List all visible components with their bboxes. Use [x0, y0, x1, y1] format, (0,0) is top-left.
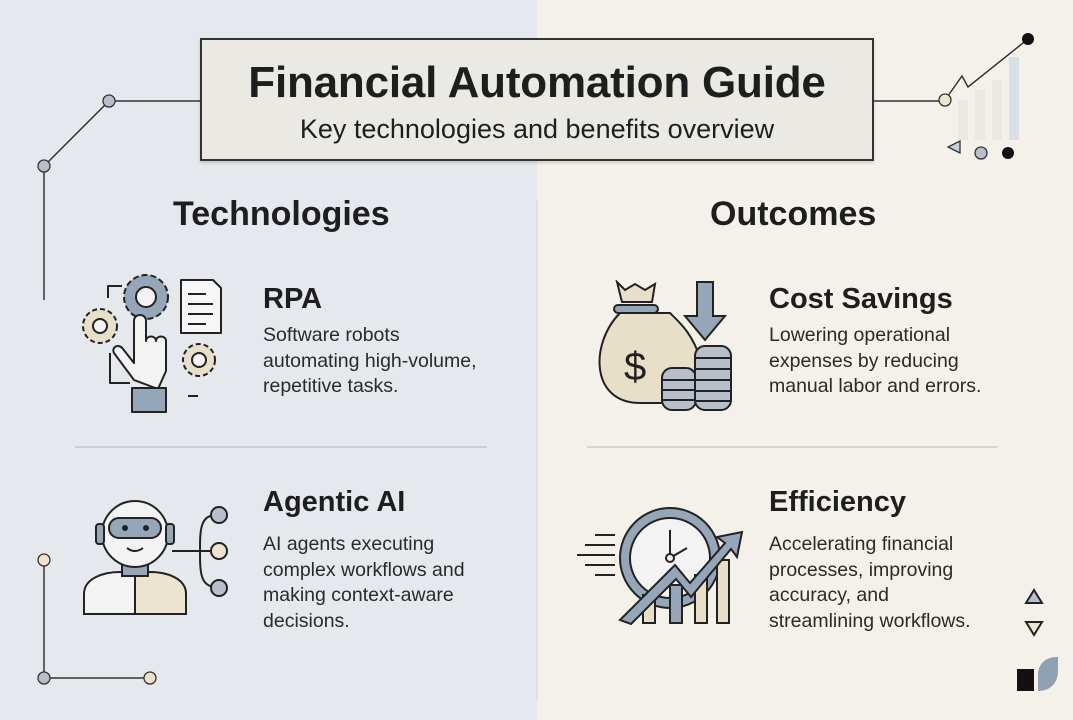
Efficiency title: Efficiency: [769, 486, 906, 518]
title box: [200, 38, 874, 161]
Efficiency description: processes, improving: [769, 558, 953, 580]
icon: cost savings: $: [624, 345, 646, 389]
Agentic AI description: decisions.: [263, 610, 350, 632]
subtitle: Key technologies and benefits overview: [300, 114, 774, 144]
title: Financial Automation Guide: [248, 58, 826, 107]
Efficiency description: [769, 533, 971, 632]
icon: Agentic AI: [83, 500, 228, 615]
heading: Outcomes: Outcomes: [710, 195, 876, 233]
Cost Savings title: Cost Savings: [769, 283, 953, 315]
decoration: left circuit lines: [37, 94, 200, 685]
Agentic AI description: AI agents executing: [263, 533, 434, 555]
heading: Technologies: Technologies: [173, 195, 390, 233]
Cost Savings description: [769, 324, 981, 397]
Efficiency description: accuracy, and: [769, 584, 889, 606]
RPA description: [263, 324, 477, 397]
icon: efficiency: [577, 507, 744, 625]
RPA description: automating high-volume,: [263, 350, 477, 372]
Agentic AI title: Agentic AI: [263, 486, 405, 518]
decoration: triangles and shapes: [1017, 588, 1058, 691]
Cost Savings description: expenses by reducing: [769, 350, 959, 372]
RPA title: RPA: [263, 283, 322, 315]
Efficiency description: Accelerating financial: [769, 533, 953, 555]
Efficiency description: streamlining workflows.: [769, 610, 971, 632]
decoration: right chart: [874, 33, 1034, 160]
Agentic AI description: complex workflows and: [263, 558, 465, 580]
RPA description: repetitive tasks.: [263, 375, 398, 397]
Cost Savings description: Lowering operational: [769, 324, 950, 346]
Agentic AI description: [263, 533, 465, 632]
icon: cost savings: [598, 280, 732, 411]
RPA description: Software robots: [263, 324, 400, 346]
Cost Savings description: manual labor and errors.: [769, 375, 981, 397]
Agentic AI description: making context-aware: [263, 584, 454, 606]
icon: RPA: [82, 274, 222, 413]
